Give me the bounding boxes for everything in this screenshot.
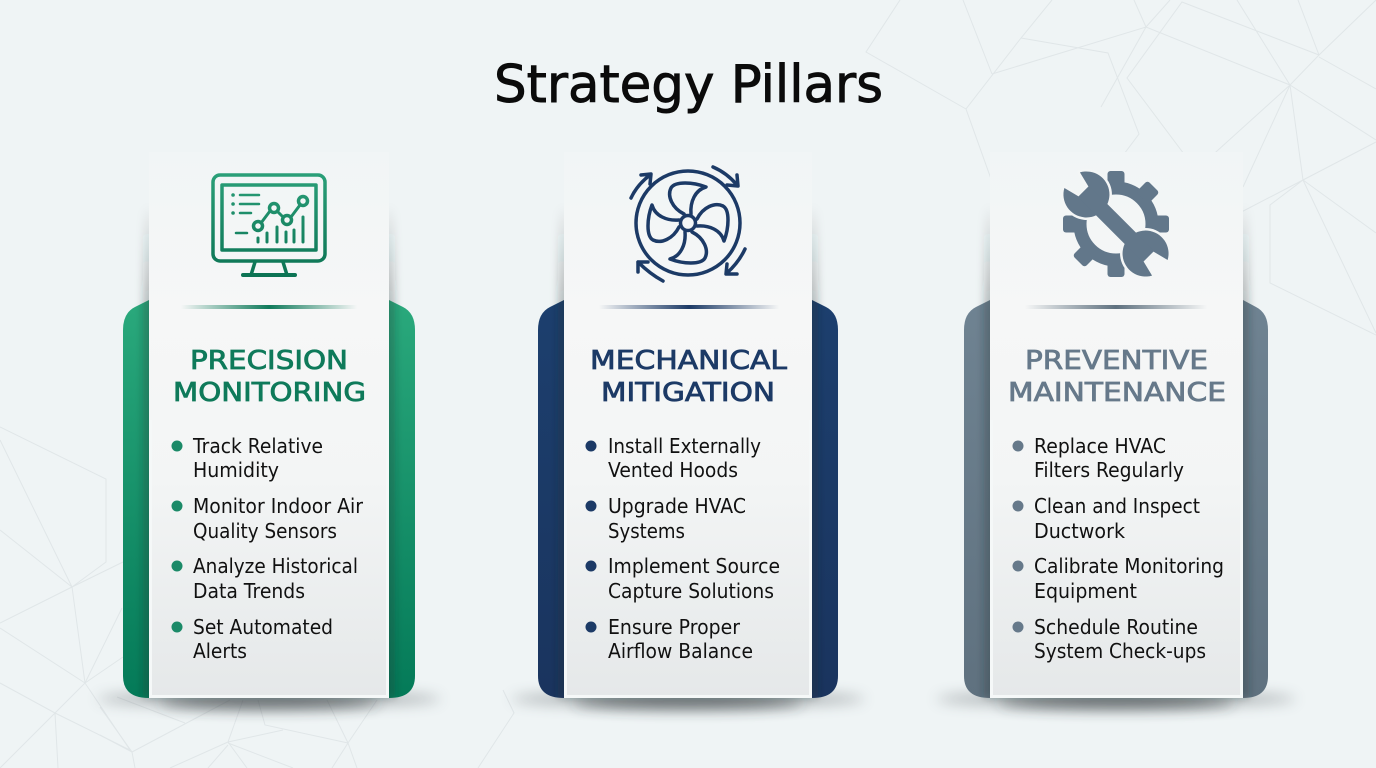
bullet list: Clean and Inspect bbox=[1034, 494, 1200, 518]
bullet list: Install Externally bbox=[608, 434, 761, 458]
heading bbox=[1008, 346, 1226, 408]
divider bbox=[599, 305, 779, 309]
icon: monitor with chart bbox=[213, 175, 325, 275]
bullet list bbox=[1012, 434, 1224, 663]
heading: MONITORING bbox=[173, 378, 366, 408]
bullet list: Upgrade HVAC bbox=[608, 494, 746, 518]
bullet list: Schedule Routine bbox=[1034, 615, 1198, 639]
bullet list: Calibrate Monitoring bbox=[1034, 554, 1224, 578]
bullet list: Quality Sensors bbox=[193, 519, 337, 543]
bullet list: Track Relative bbox=[192, 434, 323, 458]
bullet list: Ensure Proper bbox=[608, 615, 741, 639]
icon: fan with rotation arrows bbox=[631, 167, 745, 281]
bullet list: Systems bbox=[608, 519, 685, 543]
bullet list: Data Trends bbox=[193, 579, 305, 603]
bullet list bbox=[586, 434, 780, 663]
heading bbox=[173, 346, 366, 408]
heading: PREVENTIVE bbox=[1025, 346, 1208, 376]
bullet list: Humidity bbox=[193, 458, 279, 482]
bullet list bbox=[172, 434, 364, 663]
divider bbox=[1025, 305, 1207, 309]
bullet list: Replace HVAC bbox=[1034, 434, 1166, 458]
heading bbox=[590, 346, 788, 408]
bullet list: Monitor Indoor Air bbox=[193, 494, 364, 518]
bullet list: Vented Hoods bbox=[608, 458, 738, 482]
bullet list: System Check-ups bbox=[1034, 639, 1206, 663]
icon: gear and wrench bbox=[1056, 164, 1176, 284]
heading: PRECISION bbox=[190, 346, 348, 376]
bullet list: Airflow Balance bbox=[608, 639, 753, 663]
heading: MECHANICAL bbox=[590, 346, 788, 376]
bullet list: Set Automated bbox=[193, 615, 333, 639]
bullet list: Filters Regularly bbox=[1034, 458, 1184, 482]
title: Strategy Pillars bbox=[494, 55, 883, 115]
bullet list: Ductwork bbox=[1034, 519, 1125, 543]
divider bbox=[181, 305, 357, 309]
bullet list: Analyze Historical bbox=[193, 554, 358, 578]
bullet list: Capture Solutions bbox=[608, 579, 774, 603]
bullet list: Alerts bbox=[193, 639, 247, 663]
panel: preventive maintenance bbox=[936, 152, 1296, 709]
bullet list: Implement Source bbox=[608, 554, 780, 578]
heading: MAINTENANCE bbox=[1008, 378, 1226, 408]
panel: precision monitoring bbox=[97, 152, 441, 709]
panel: mechanical mitigation bbox=[511, 152, 865, 709]
heading: MITIGATION bbox=[601, 378, 775, 408]
bullet list: Equipment bbox=[1034, 579, 1137, 603]
